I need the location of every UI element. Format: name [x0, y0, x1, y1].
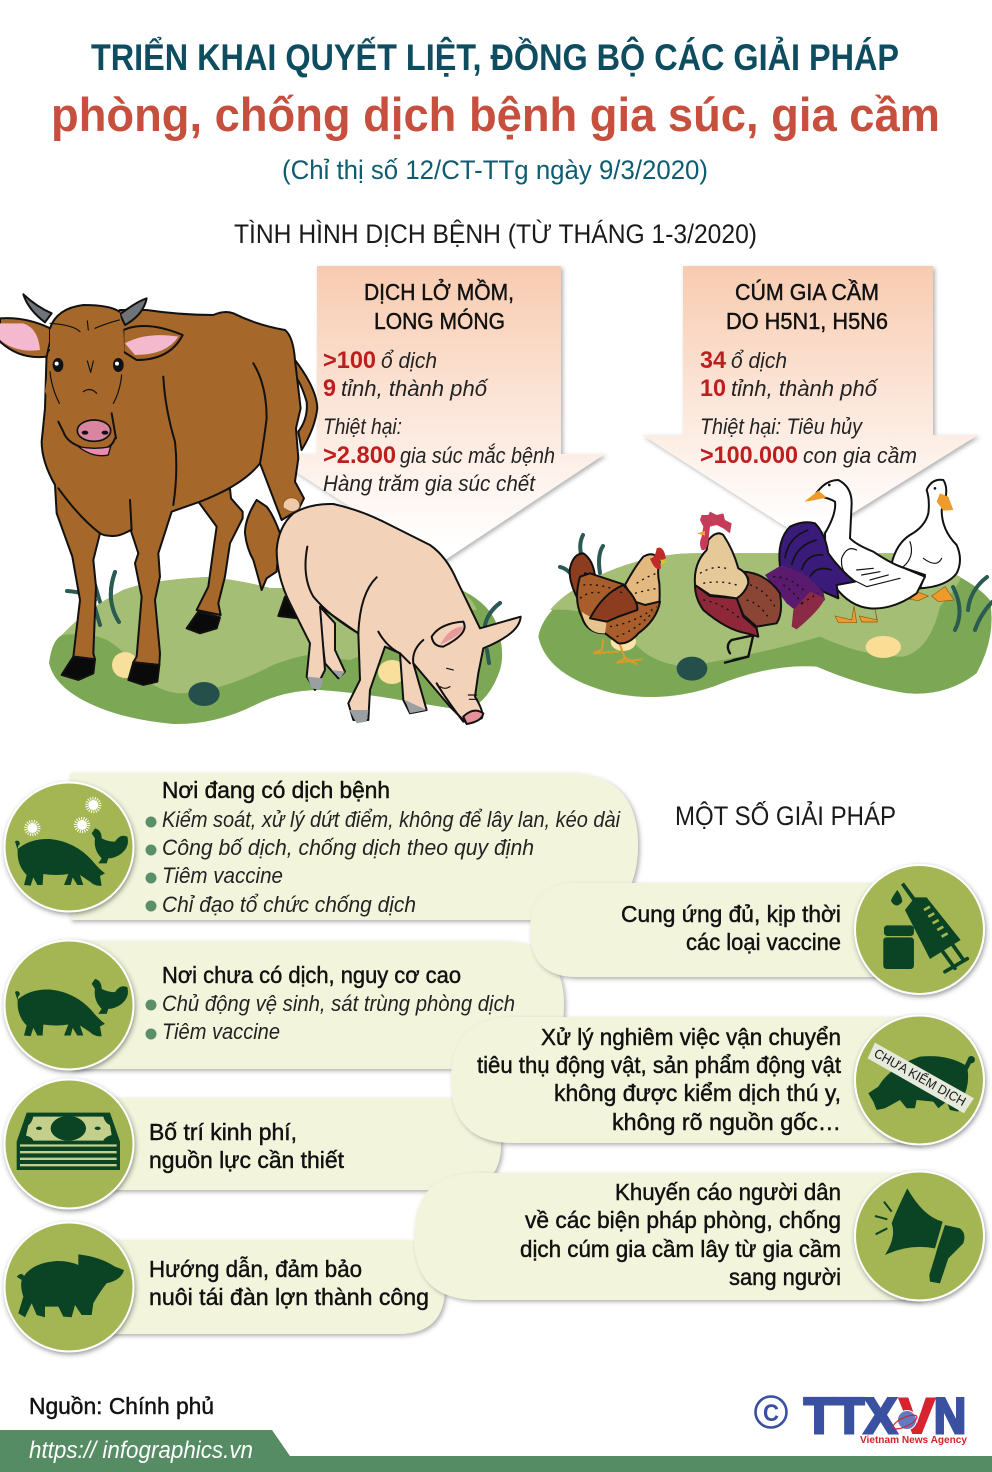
footer band — [0, 1430, 992, 1472]
hen — [570, 548, 667, 664]
panel: public advice: sang người — [729, 1264, 841, 1290]
cow — [0, 294, 317, 685]
callout figures: >100 — [323, 347, 376, 374]
callout figures: 34 — [700, 347, 727, 374]
icon: banknotes — [4, 1080, 134, 1208]
bullet list: outbreak measures — [146, 807, 621, 917]
panel: restocking: Hướng dẫn, đảm bảo — [149, 1256, 362, 1282]
illustration: poultry on grass — [538, 480, 992, 697]
illustration: cow and pig on grass — [0, 294, 521, 724]
heading: high-risk areas: Nơi chưa có dịch, nguy cơ cao — [162, 962, 461, 988]
logo: TTXVN: TTX — [804, 1388, 897, 1444]
callout heading — [726, 278, 888, 334]
section heading: solutions: MỘT SỐ GIẢI PHÁP — [675, 799, 896, 831]
source: Nguồn: Chính phủ — [29, 1393, 214, 1419]
panel: vaccine supply: các loại vaccine — [686, 929, 841, 955]
panel: restocking — [70, 1240, 445, 1334]
heading: outbreak areas: Nơi đang có dịch bệnh — [162, 777, 390, 803]
panel: high-risk areas — [70, 941, 564, 1069]
rooster — [695, 512, 855, 663]
pig — [277, 504, 521, 724]
icon: unchecked pig — [855, 1016, 984, 1144]
callout figures: Thiệt hại: — [323, 414, 402, 439]
callout heading: DO H5N1, H5N6 — [726, 308, 888, 334]
panel: transport control: Xử lý nghiêm việc vận chuyển — [541, 1024, 841, 1050]
callout heading: LONG MÓNG — [374, 308, 505, 334]
icon: pig and rooster with virus — [4, 782, 134, 912]
panel: funding: Bố trí kinh phí, — [149, 1119, 297, 1145]
logo: TTXVN: C — [763, 1400, 779, 1427]
bullet list: high-risk measures — [146, 991, 515, 1044]
panel: where the outbreak is — [70, 773, 638, 920]
icon: syringe and vial — [855, 865, 984, 994]
panel: foot and mouth disease callout — [268, 266, 605, 564]
logo: TTXVN: N — [934, 1388, 966, 1444]
bullet list: high-risk measures: Chủ động vệ sinh, sát trùng phòng dịch — [162, 991, 515, 1016]
panel: funding: nguồn lực cần thiết — [149, 1147, 345, 1173]
grass patch left — [49, 572, 513, 724]
icon: megaphone — [855, 1172, 984, 1300]
panel: vaccine supply — [530, 883, 920, 977]
bullet list: outbreak measures: Công bố dịch, chống dịch theo quy định — [162, 835, 534, 860]
stamp label: CHƯA KIỂM DỊCH — [872, 1046, 969, 1109]
logo: TTXVN — [756, 1388, 967, 1446]
logo: TTXVN: V — [899, 1388, 936, 1444]
callout heading — [364, 277, 514, 334]
callout figures: 10 — [700, 375, 726, 402]
logo: TTXVN: Vietnam News Agency — [860, 1434, 967, 1446]
panel: public advice: Khuyến cáo người dân — [615, 1179, 841, 1205]
callout figures: tỉnh, thành phố — [731, 376, 879, 401]
callout figures — [323, 347, 555, 496]
bullet list: outbreak measures: Tiêm vaccine — [162, 863, 283, 888]
ducks — [804, 480, 960, 623]
section heading: situation: TÌNH HÌNH DỊCH BỆNH (TỪ THÁNG 1-3/2020) — [234, 218, 757, 249]
panel: transport control: tiêu thụ động vật, sản phẩm động vật — [477, 1052, 842, 1078]
callout figures: ổ dịch — [381, 348, 437, 373]
bullet list: outbreak measures: Chỉ đạo tổ chức chống dịch — [162, 892, 416, 917]
grass patch right — [538, 535, 992, 697]
callout figures: gia súc mắc bệnh — [400, 443, 555, 468]
panel: funding — [70, 1098, 501, 1190]
callout heading: DỊCH LỞ MỒM, — [364, 277, 514, 305]
callout figures: con gia cầm — [803, 443, 917, 468]
icon: piglet — [4, 1222, 134, 1352]
title line 1: TRIỂN KHAI QUYẾT LIỆT, ĐỒNG BỘ CÁC GIẢI PHÁP — [91, 36, 899, 78]
callout figures: Hàng trăm gia súc chết — [323, 471, 537, 496]
bullet list: high-risk measures: Tiêm vaccine — [162, 1019, 280, 1044]
panel: public advice: về các biện pháp phòng, chống — [525, 1207, 841, 1233]
panel: avian influenza callout — [642, 266, 978, 541]
callout figures — [700, 347, 917, 469]
panel: transport control: không rõ nguồn gốc… — [612, 1109, 841, 1135]
panel: vaccine supply: Cung ứng đủ, kịp thời — [621, 901, 841, 927]
bullet list: outbreak measures: Kiểm soát, xử lý dứt điểm, không để lây lan, kéo dài — [162, 807, 621, 832]
subtitle: (Chỉ thị số 12/CT-TTg ngày 9/3/2020) — [282, 155, 708, 185]
callout figures: 9 — [323, 375, 336, 402]
callout figures: tỉnh, thành phố — [341, 376, 489, 401]
footer url: https:// infographics.vn — [29, 1437, 253, 1464]
panel: public advice: dịch cúm gia cầm lây từ gia cầm — [520, 1236, 841, 1262]
title line 2: phòng, chống dịch bệnh gia súc, gia cầm — [51, 88, 940, 141]
panel: transport control — [451, 1017, 920, 1143]
callout figures: >100.000 — [700, 442, 798, 469]
callout figures: >2.800 — [323, 442, 396, 469]
callout heading: CÚM GIA CẦM — [735, 278, 879, 305]
icon: pig and rooster — [4, 940, 134, 1070]
panel: transport control: không được kiểm dịch thú y, — [554, 1080, 841, 1106]
panel: restocking: nuôi tái đàn lợn thành công — [149, 1284, 429, 1310]
panel: public advice — [414, 1173, 920, 1300]
callout figures: Thiệt hại: Tiêu hủy — [700, 414, 864, 439]
callout figures: ổ dịch — [731, 348, 787, 373]
